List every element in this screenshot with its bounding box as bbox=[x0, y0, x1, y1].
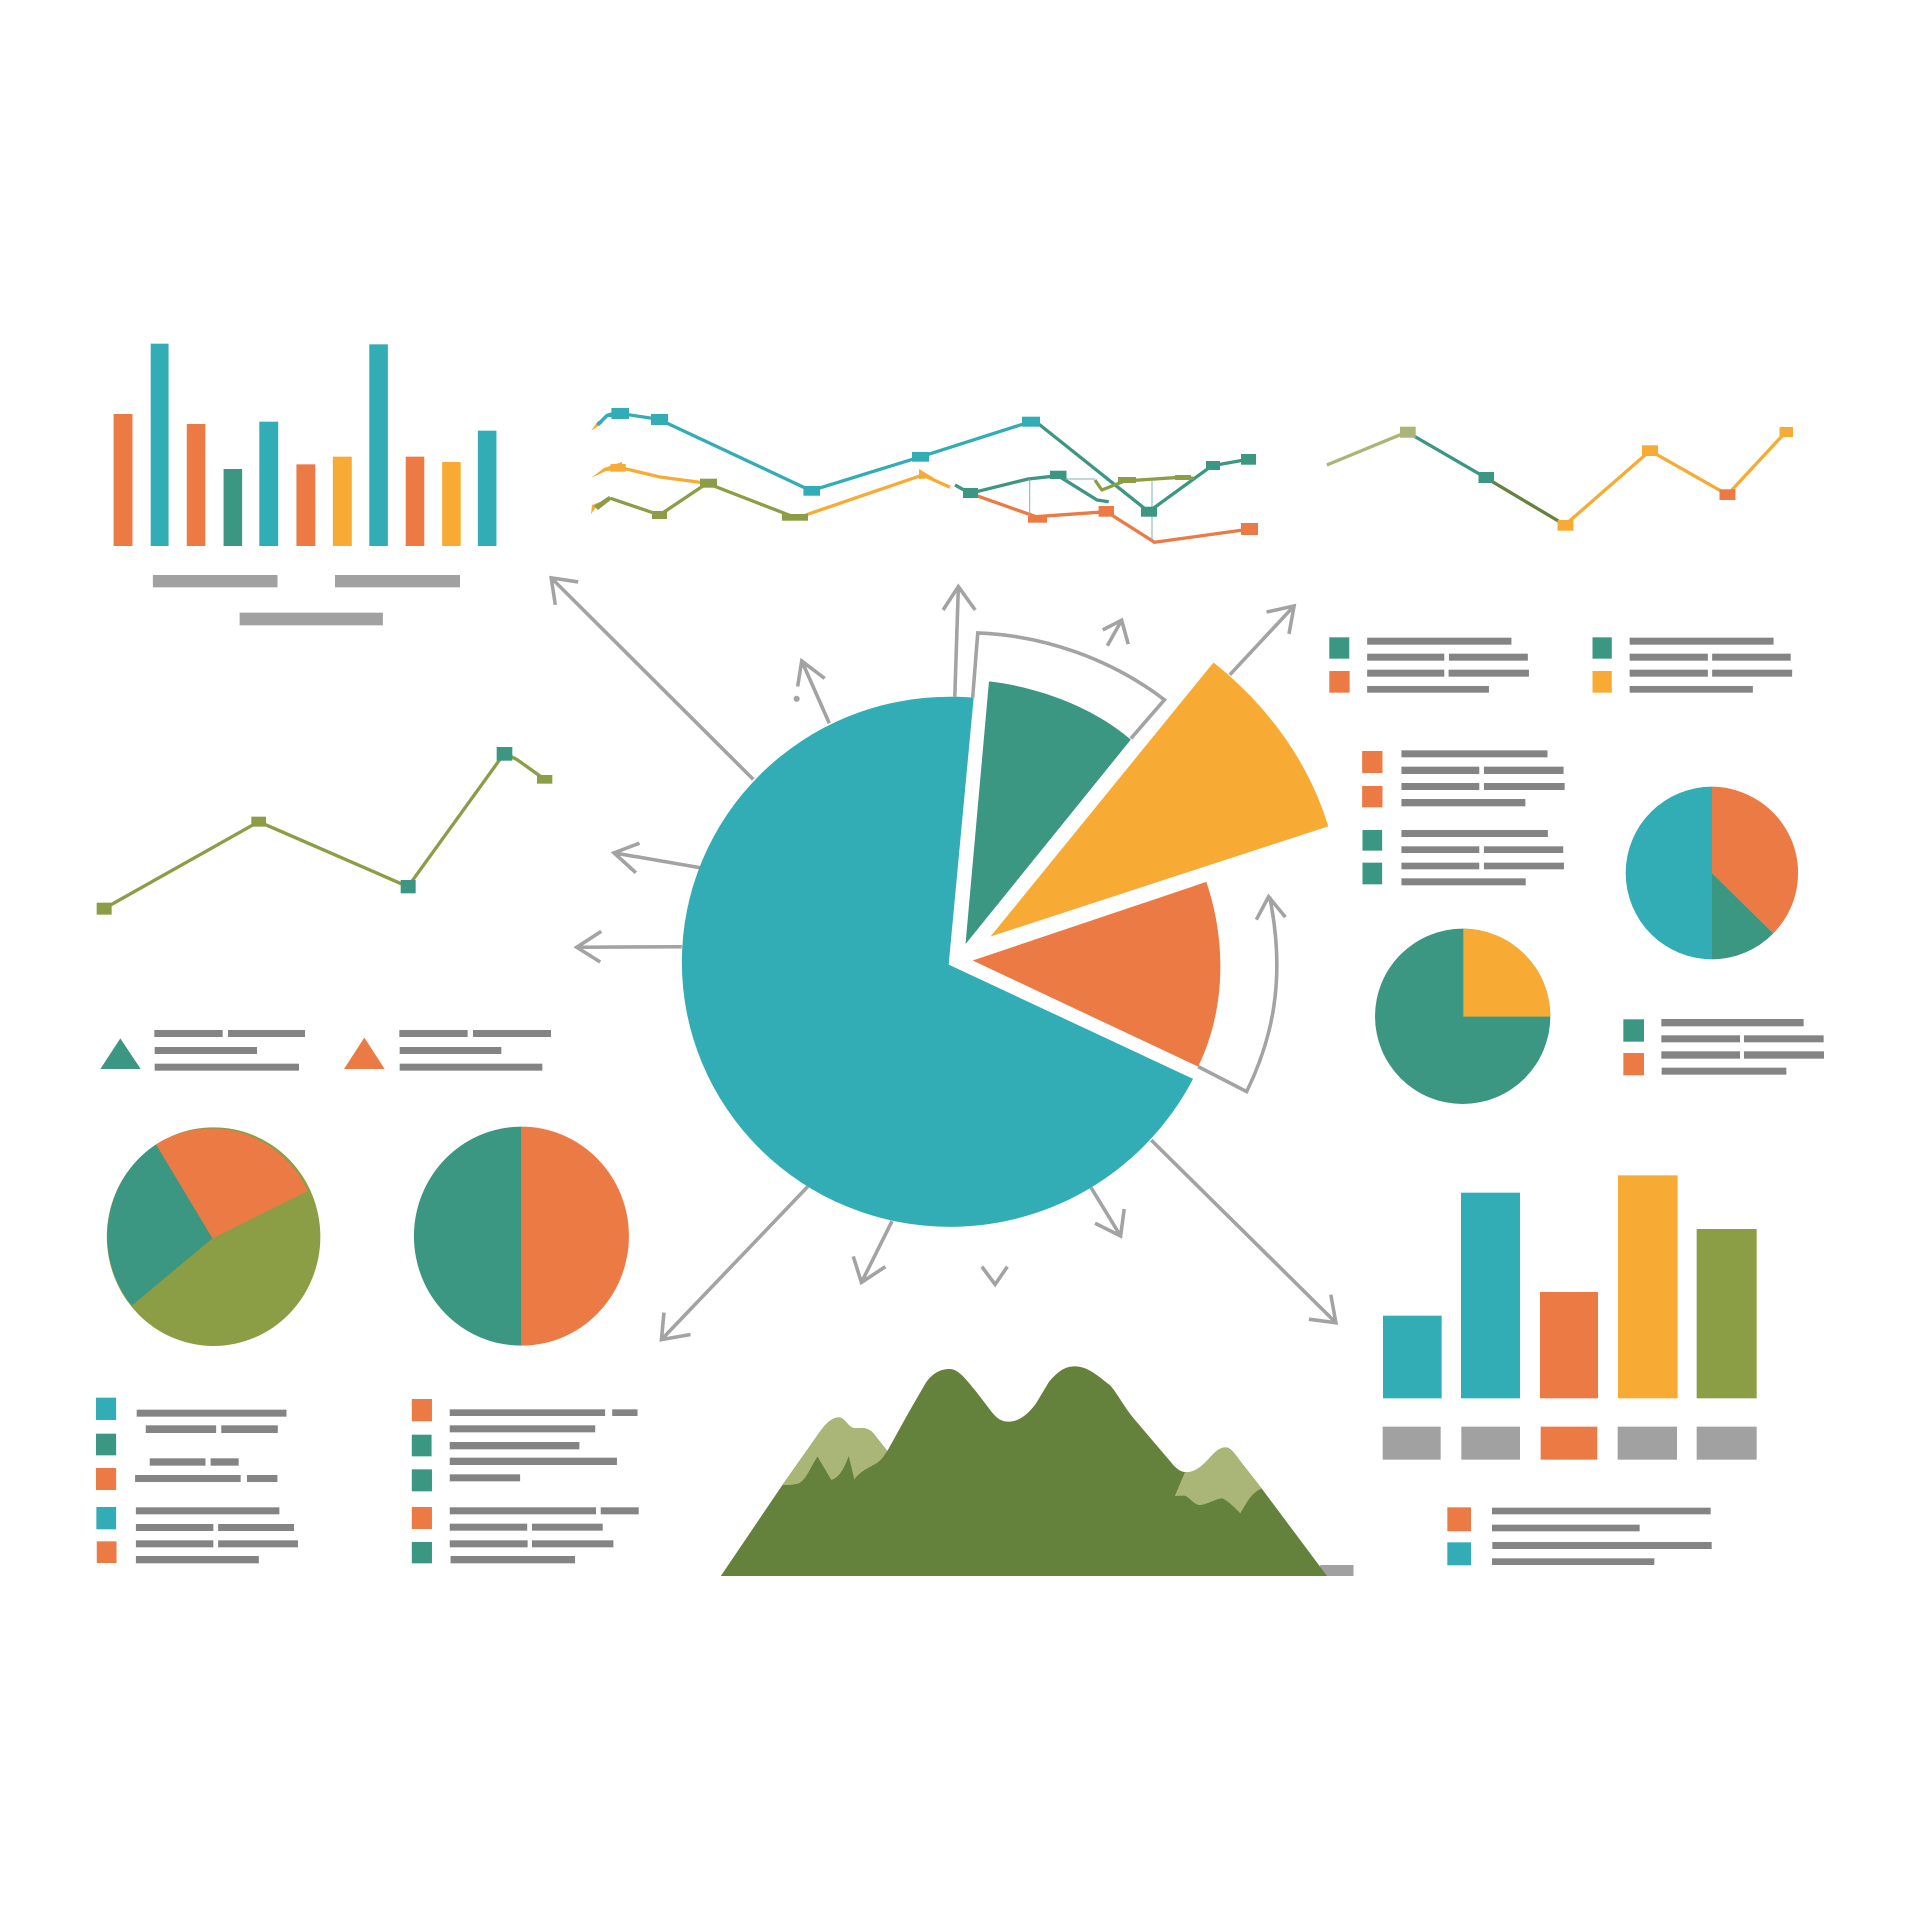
pie chart: three slices bottom left bbox=[107, 1127, 320, 1346]
pie slice: orange bbox=[973, 882, 1220, 1067]
legend: bottom left second column bbox=[412, 1399, 639, 1563]
bar chart: bottom right bbox=[1383, 1175, 1757, 1460]
legend: triangle items bbox=[100, 1030, 551, 1071]
line chart: multi-series top centre bbox=[591, 408, 1258, 542]
outline arc around green slice bbox=[973, 633, 1164, 739]
main exploded pie chart with arrows bbox=[551, 578, 1336, 1340]
line chart: top right bbox=[1327, 427, 1793, 531]
pie chart: half green half orange bbox=[414, 1127, 629, 1346]
arrows radiating from the pie bbox=[551, 578, 1336, 1340]
pie slice: yellow bbox=[991, 663, 1328, 937]
legend: below right pie bbox=[1623, 1019, 1824, 1075]
pie chart: teal, orange and green, right bbox=[1626, 787, 1798, 959]
pie chart: green and yellow quarter bbox=[1375, 929, 1550, 1104]
line chart: left bbox=[97, 747, 552, 915]
pie slice: large teal bbox=[682, 697, 1193, 1227]
outline arc beside orange slice with arrow bbox=[1198, 897, 1285, 1092]
legend: middle right bbox=[1362, 750, 1565, 885]
pie slice: green bbox=[966, 681, 1131, 944]
legend: bottom left column bbox=[96, 1398, 298, 1563]
mountain area chart bbox=[721, 1366, 1354, 1576]
bar chart: top left bbox=[114, 344, 496, 625]
legend: top right pair bbox=[1329, 637, 1792, 693]
legend: below bottom right bar chart bbox=[1447, 1507, 1712, 1565]
